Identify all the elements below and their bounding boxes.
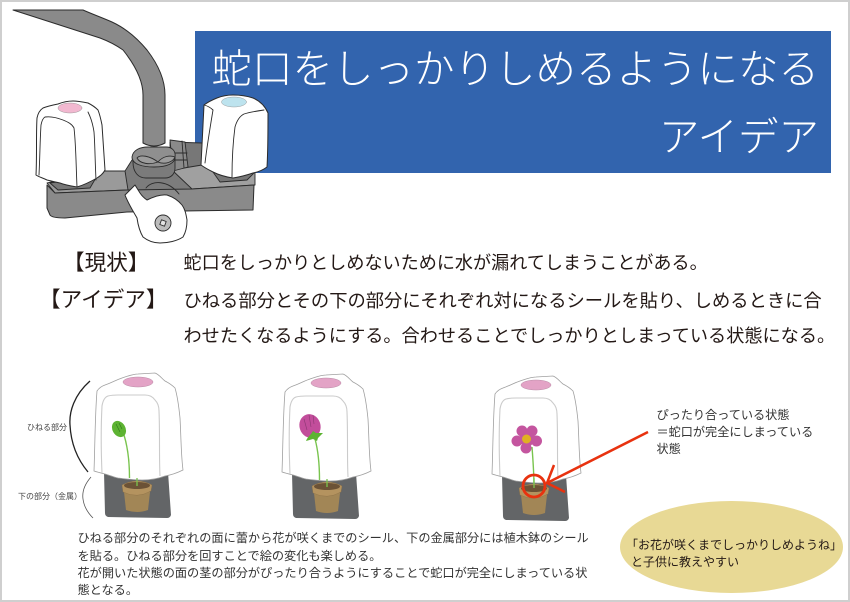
lever: [125, 185, 187, 243]
right handle: [201, 95, 268, 178]
faucet base: [47, 142, 255, 218]
speech ellipse: [620, 501, 843, 593]
faucet spout: [13, 10, 165, 146]
speech line 2: と子供に教えやすい: [631, 555, 739, 569]
bracket: twist part: [70, 381, 90, 472]
title banner: [195, 31, 831, 173]
pot: [124, 492, 150, 512]
title line 2: アイデア: [659, 114, 819, 160]
blue cap: [222, 97, 246, 107]
title line 1: 蛇口をしっかりしめるようになる: [212, 46, 819, 92]
explanation text: ひねる部分のそれぞれの面に蕾から花が咲くまでのシール、下の金属部分には植木鉢のシール: [78, 531, 589, 545]
stage 2: coloured bud: [282, 374, 371, 519]
idea text line 2: わせたくなるようにする。合わせることでしっかりとしまっている状態になる。: [184, 326, 835, 346]
left handle: [36, 101, 105, 187]
bracket: lower part: [83, 477, 93, 518]
callout note: 状態: [656, 442, 681, 456]
explanation text: [78, 531, 589, 597]
red arrow: [547, 432, 648, 492]
label: lower metal part: 下の部分（金属）: [18, 492, 82, 501]
callout note: ＝蛇口が完全にしまっている: [656, 425, 813, 439]
explanation text: 花が開いた状態の面の茎の部分がぴったり合うようにすることで蛇口が完全にしまっている状: [78, 566, 587, 580]
pink cap: [58, 103, 82, 113]
callout note: ぴったり合っている状態: [656, 408, 789, 422]
explanation text: 態となる。: [78, 583, 138, 597]
idea text line 1: ひねる部分とその下の部分にそれぞれ対になるシールを貼り、しめるときに合: [184, 290, 822, 310]
pot: [519, 484, 549, 515]
stage 3: open flower: [492, 376, 581, 521]
current state text: 蛇口をしっかりとしめないために水が漏れてしまうことがある。: [184, 253, 708, 273]
label: twist part: ひねる部分: [27, 423, 67, 432]
faucet nut: [132, 140, 188, 178]
pot: [312, 479, 342, 513]
red circle highlight: [523, 475, 545, 497]
stage 1: bud: [94, 373, 183, 518]
explanation text: を貼る。ひねる部分を回すことで絵の変化も楽しめる。: [78, 549, 381, 563]
lever screw: [155, 215, 171, 231]
callout note: [656, 408, 813, 456]
label: current state: 【現状】: [63, 250, 149, 275]
speech line 1: 「お花が咲くまでしっかりしめようね」: [626, 538, 842, 552]
label: idea: 【アイデア】: [39, 287, 167, 312]
